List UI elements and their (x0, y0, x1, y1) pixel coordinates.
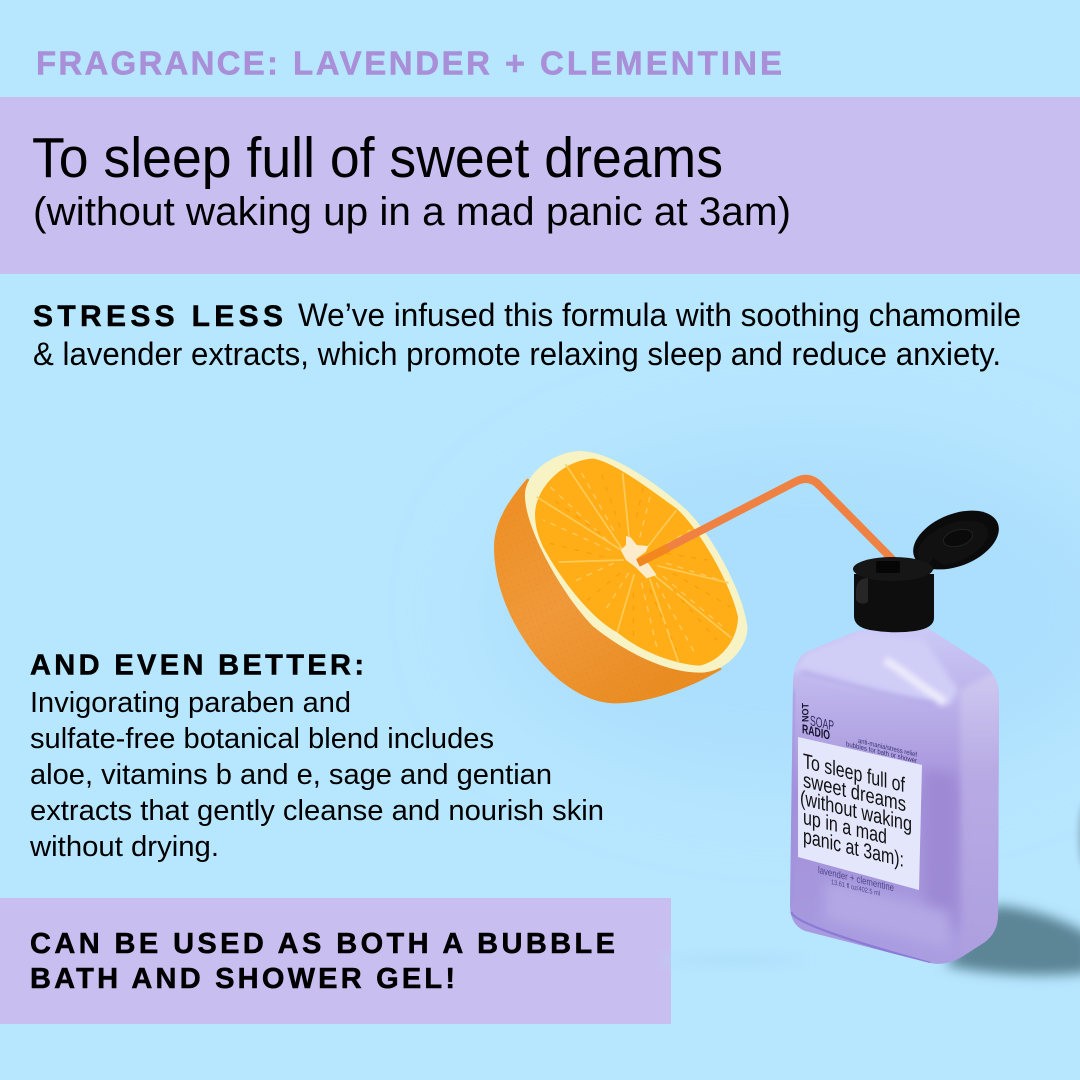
icon: bottle cast shadow (665, 801, 1080, 975)
text block: and even better: without drying. (29, 831, 219, 863)
icon: orange half (494, 451, 747, 703)
bottle brand mark: SOAP (810, 713, 834, 735)
subtitle: (without waking up in a mad panic at 3am) (33, 190, 791, 234)
bottle fragrance text: lavender + clementine (818, 865, 894, 894)
orange core (621, 536, 657, 578)
fragrance heading: LAVENDER (293, 44, 490, 82)
text block: and even better: AND EVEN BETTER: (30, 650, 364, 682)
text block: stress less: We’ve infused this formula with soothing chamomile (298, 297, 1021, 333)
bottle brand mark: RADIO (802, 721, 830, 743)
icon: bottle cap (853, 557, 934, 632)
panel: bubble bath callout (0, 898, 671, 1024)
bottle label: (without waking (800, 786, 912, 836)
fragrance heading: FRAGRANCE: (36, 44, 278, 82)
orange pulp flecks (543, 470, 727, 657)
bottle brand mark (800, 702, 834, 744)
bottle fragrance text: 13.61 fl oz/402.5 ml (831, 878, 880, 898)
bottle tagline: bubbles for bath or shower (846, 740, 918, 765)
text block: stress less: & lavender extracts, which promote relaxing sleep and reduce anxiety. (33, 336, 1001, 372)
fragrance heading: + (505, 44, 525, 82)
orange flesh (535, 459, 738, 666)
text block: and even better (29, 650, 604, 863)
bottle label: sweet dreams (803, 768, 906, 816)
panel: bubble bath callout: BATH AND SHOWER GEL! (30, 963, 455, 995)
text block: stress less (33, 297, 1021, 372)
orange segment membranes (537, 465, 731, 662)
bottle label: To sleep full of (803, 749, 905, 797)
orange peel (494, 478, 722, 703)
background soft glow behind product (490, 440, 1080, 780)
bottle label: panic at 3am): (803, 824, 904, 872)
text block: and even better: Invigorating paraben and (30, 687, 351, 719)
panel: bubble bath callout: CAN BE USED AS BOTH A BUBBLE (30, 928, 615, 960)
panel: title band (0, 97, 1080, 274)
title: To sleep full of sweet dreams (32, 126, 723, 190)
icon: flip cap lid (905, 499, 1007, 581)
text block: and even better: sulfate-free botanical blend includes (30, 723, 494, 755)
bottle highlights and shading (791, 632, 1002, 963)
text block: and even better: aloe, vitamins b and e, sage and gentian (30, 759, 552, 791)
bottle tagline: anti-mania/stress relief (858, 737, 917, 759)
icon: bendy straw (638, 479, 893, 563)
fragrance heading: CLEMENTINE (540, 44, 782, 82)
bottle label (798, 737, 922, 890)
bottle label: up in a mad (803, 805, 887, 849)
fragrance heading (36, 44, 782, 82)
text block: stress less: STRESS LESS (33, 300, 283, 333)
icon: bottle (790, 628, 1002, 964)
bottle brand mark: NOT (800, 702, 810, 722)
text block: and even better: extracts that gently cleanse and nourish skin (30, 795, 604, 827)
bottle tagline (846, 734, 918, 765)
bottle body (790, 628, 999, 964)
orange pith rim (525, 451, 747, 673)
